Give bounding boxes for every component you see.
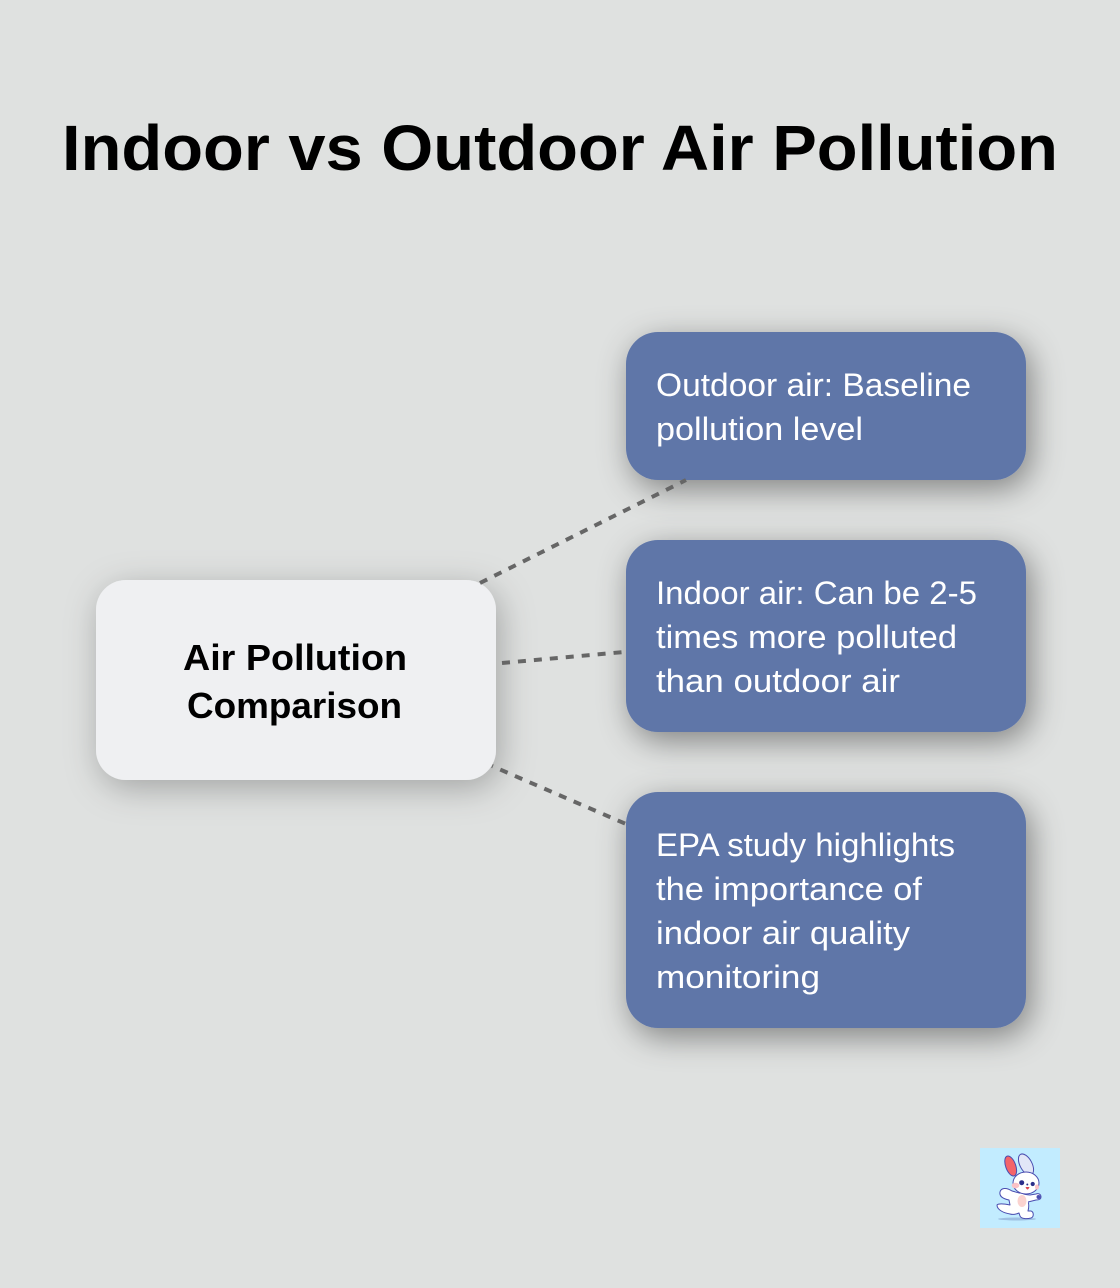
text: EPA study: the importance of	[656, 871, 922, 907]
panel: EPA study	[626, 792, 1026, 1028]
label: air pollution comparison: Air Pollution	[183, 637, 407, 678]
connector: to indoor air	[502, 652, 624, 663]
connector: to outdoor air	[480, 480, 686, 583]
text: outdoor air: Outdoor air: Baseline	[656, 367, 971, 403]
label: air pollution comparison	[183, 637, 407, 726]
panel: air pollution comparison	[96, 580, 496, 780]
icon: running rabbit logo	[980, 1148, 1060, 1228]
title: Indoor vs Outdoor Air Pollution	[62, 112, 1058, 184]
text: EPA study: indoor air quality	[656, 915, 910, 951]
panel: outdoor air	[626, 332, 1026, 480]
panel: indoor air	[626, 540, 1026, 732]
text: EPA study: monitoring	[656, 959, 820, 995]
text: EPA study: EPA study highlights	[656, 827, 955, 863]
text: indoor air	[656, 575, 977, 699]
connector: to EPA study	[492, 766, 626, 824]
text: outdoor air: pollution level	[656, 411, 863, 447]
label: air pollution comparison: Comparison	[187, 685, 402, 726]
text: outdoor air	[656, 367, 971, 447]
text: indoor air: than outdoor air	[656, 663, 900, 699]
text: EPA study	[656, 827, 955, 995]
text: indoor air: times more polluted	[656, 619, 957, 655]
text: indoor air: Indoor air: Can be 2-5	[656, 575, 977, 611]
